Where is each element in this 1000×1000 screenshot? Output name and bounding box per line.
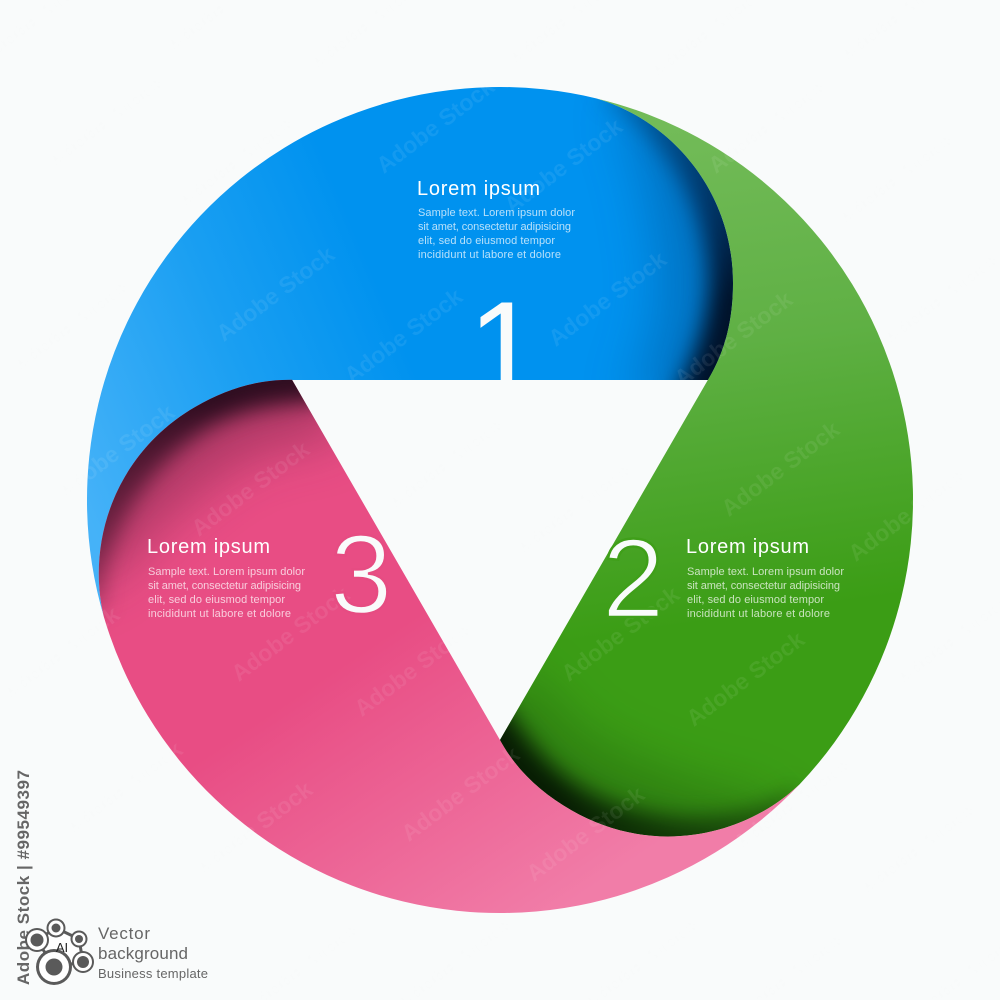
body text 3: Sample text. Lorem ipsum dolor xyxy=(148,566,305,578)
icon: AI logo cluster xyxy=(25,918,94,985)
block 3 text xyxy=(147,536,305,620)
watermark pattern: Adobe Stock xyxy=(171,109,299,214)
watermark pattern: Adobe Stock xyxy=(371,73,499,178)
body text 2: Sample text. Lorem ipsum dolor xyxy=(687,566,844,578)
heading 2: Lorem ipsum xyxy=(686,536,809,558)
heading 3: Lorem ipsum xyxy=(147,536,270,558)
stock id vertical label: Adobe Stock | #99549397 xyxy=(14,770,33,985)
watermark pattern: Adobe Stock xyxy=(853,796,981,901)
body text 3: incididunt ut labore et dolore xyxy=(148,608,291,620)
block 1 text xyxy=(417,178,575,261)
watermark pattern: Adobe Stock xyxy=(543,246,671,351)
body text 1: Sample text. Lorem ipsum dolor xyxy=(418,207,575,219)
body text 3: elit, sed do eiusmod tempor xyxy=(148,594,285,606)
watermark pattern: Adobe Stock xyxy=(728,751,856,856)
watermark pattern: Adobe Stock xyxy=(51,399,179,504)
body text 2: incididunt ut labore et dolore xyxy=(687,608,830,620)
panel 1: blue segment xyxy=(87,87,733,616)
body text 1: incididunt ut labore et dolore xyxy=(418,249,561,261)
body text 1 xyxy=(418,207,575,261)
caption: vector background: Vector xyxy=(98,924,150,943)
heading 1: Lorem ipsum xyxy=(417,178,540,200)
watermark pattern: Adobe Stock xyxy=(211,241,339,346)
watermark pattern: Adobe Stock xyxy=(189,776,317,881)
number 3: 3 xyxy=(330,512,392,637)
panel 2: green segment xyxy=(500,98,914,836)
caption: vector background: background xyxy=(98,944,188,963)
watermark pattern: Adobe Stock xyxy=(186,436,314,541)
panel 3: pink segment xyxy=(98,380,799,913)
block 2 text xyxy=(686,536,844,620)
watermark pattern: Adobe Stock xyxy=(703,73,831,178)
watermark pattern: Adobe Stock xyxy=(521,781,649,886)
watermark pattern: Adobe Stock xyxy=(831,126,959,231)
watermark pattern: Adobe Stock xyxy=(556,581,684,686)
caption: vector background: Business template xyxy=(98,966,208,981)
watermark pattern: Adobe Stock xyxy=(669,286,797,391)
number 1: 1 xyxy=(468,274,540,420)
watermark pattern: Adobe Stock xyxy=(509,456,637,561)
icon: AI logo cluster: AI xyxy=(56,940,68,955)
watermark pattern: Adobe Stock xyxy=(59,736,187,841)
watermark pattern: Adobe Stock xyxy=(499,113,627,218)
body text 3: sit amet, consectetur adipisicing xyxy=(148,580,301,592)
number 2: 2 xyxy=(602,516,664,641)
watermark pattern: Adobe Stock xyxy=(381,411,509,516)
watermark pattern: Adobe Stock xyxy=(843,461,971,566)
watermark pattern: Adobe Stock xyxy=(0,601,124,706)
watermark pattern: Adobe Stock xyxy=(6,273,134,378)
watermark pattern: Adobe Stock xyxy=(396,741,524,846)
watermark pattern: Adobe Stock xyxy=(41,69,169,174)
watermark pattern: Adobe Stock xyxy=(681,626,809,731)
body text 2: sit amet, consectetur adipisicing xyxy=(687,580,840,592)
caption: vector background xyxy=(98,924,208,981)
body text 2: elit, sed do eiusmod tempor xyxy=(687,594,824,606)
body text 1: sit amet, consectetur adipisicing xyxy=(418,221,571,233)
watermark pattern: Adobe Stock xyxy=(226,581,354,686)
watermark pattern: Adobe Stock xyxy=(339,283,467,388)
body text 3 xyxy=(148,566,305,620)
body text 1: elit, sed do eiusmod tempor xyxy=(418,235,555,247)
watermark pattern: Adobe Stock xyxy=(716,416,844,521)
watermark pattern: Adobe Stock xyxy=(349,616,477,721)
body text 2 xyxy=(687,566,844,620)
